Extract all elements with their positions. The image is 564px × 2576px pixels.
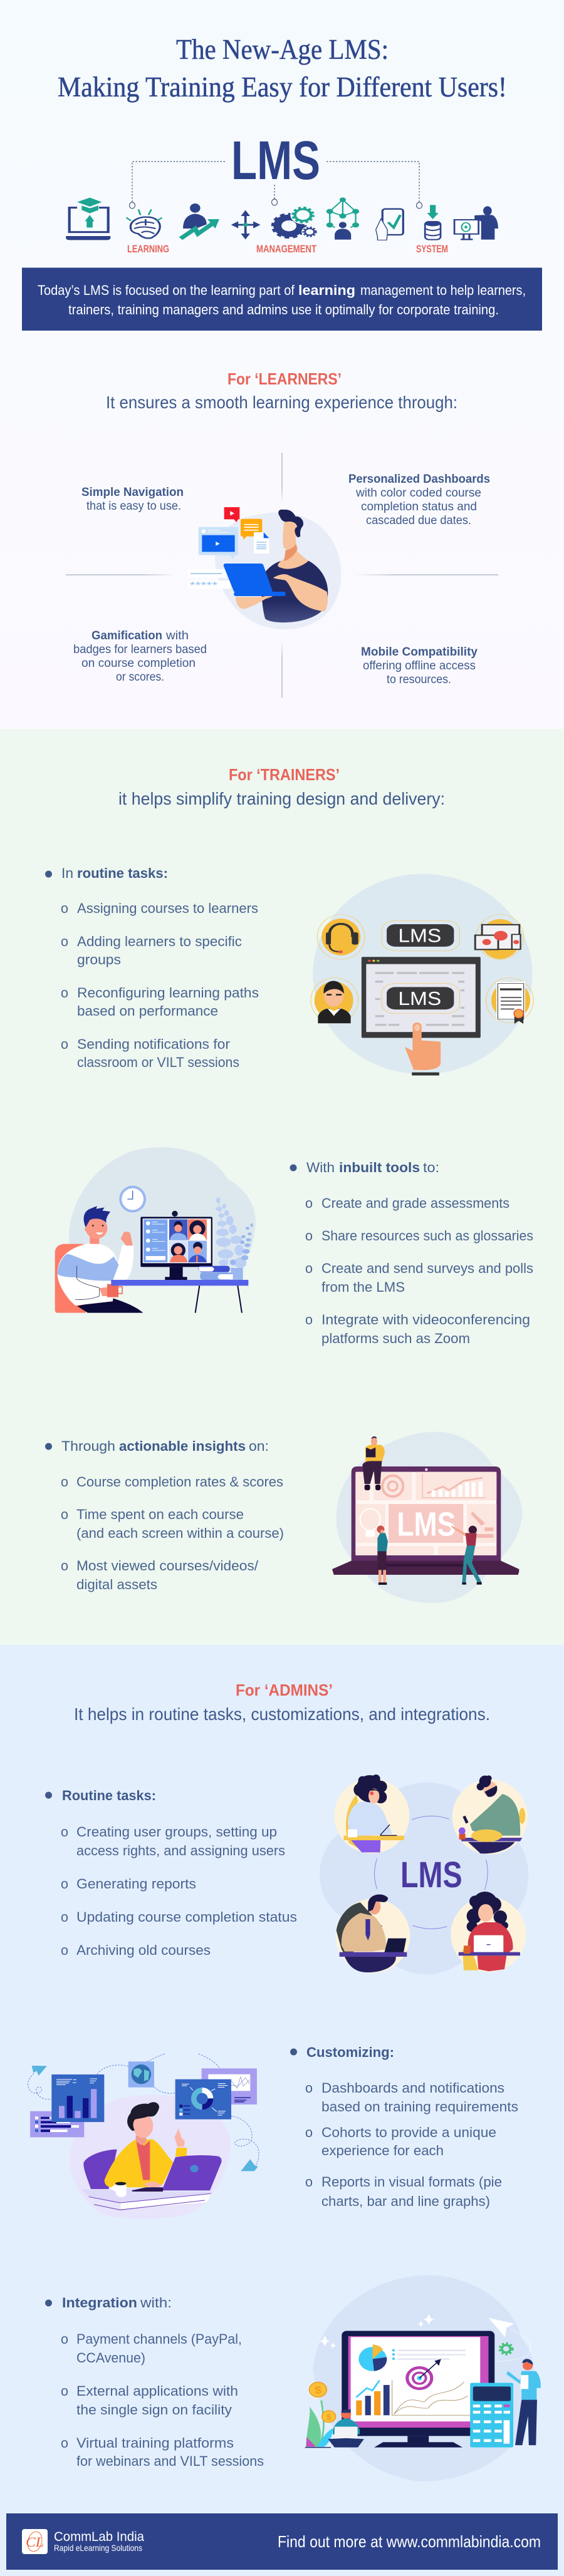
list: routine tasks admin: Archiving old courses [76, 1942, 211, 1958]
list: integration: o [61, 2435, 68, 2451]
list: integration: with: [140, 2295, 172, 2311]
list: customizing: Cohorts to provide a unique [321, 2125, 496, 2140]
text: gamification: or scores. [116, 671, 164, 684]
admin man with laptop [336, 1894, 410, 1973]
list: routine tasks: Assigning courses to learners [77, 900, 258, 916]
list: actionable insights [45, 1438, 284, 1592]
person thinking [377, 1525, 388, 1585]
person sitting with laptop [328, 2409, 364, 2448]
list: customizing: charts, bar and line graphs) [321, 2193, 490, 2209]
list: routine tasks: Reconfiguring learning paths [77, 985, 259, 1001]
heading: learners: For ‘LEARNERS’ [227, 369, 342, 388]
list: integration: External applications with [76, 2383, 238, 2399]
plant with coins: $ [315, 2384, 321, 2396]
list: customizing: Reports in visual formats (pie [321, 2174, 502, 2190]
heading: learners: It ensures a smooth learning experience through: [106, 393, 457, 412]
text: simple navigation [81, 486, 184, 513]
list: actionable insights: Most viewed courses/videos/ [76, 1558, 259, 1574]
illustration: learner with laptop [188, 507, 341, 629]
panel: trainers background [0, 729, 564, 1645]
list: inbuilt tools: Create and send surveys and polls [321, 1260, 533, 1276]
text: mobile compatibility: Mobile Compatibility [361, 646, 478, 659]
list: actionable insights: o [61, 1474, 68, 1490]
list: routine tasks: routine tasks: [77, 865, 168, 881]
laptop [332, 1466, 519, 1575]
icon: network of people [326, 197, 359, 240]
illustration: trainer on video call [55, 1147, 256, 1313]
list: routine tasks admin: Creating user groups, setting up [76, 1824, 277, 1840]
list: integration: CCAvenue) [76, 2350, 145, 2366]
list: actionable insights: Through [61, 1438, 115, 1454]
admin man with phone [452, 1775, 528, 1855]
footer bar: CommLab India [54, 2530, 144, 2544]
icon: brain [127, 209, 162, 238]
illustration: analytics laptop [332, 1432, 522, 1603]
list: integration: for webinars and VILT sessions [76, 2453, 264, 2469]
list: integration [45, 2295, 264, 2469]
text: gamification: badges for learners based [73, 643, 207, 656]
laptop: LMS [397, 1506, 456, 1543]
icon: gears [273, 206, 318, 238]
list: customizing: o [305, 2174, 313, 2190]
icon: laptop with graduation cap [66, 198, 110, 240]
LMS badge [382, 920, 460, 951]
heading: trainers: For ‘TRAINERS’ [229, 765, 340, 784]
list: inbuilt tools: to: [423, 1160, 439, 1175]
title [58, 34, 507, 103]
illustration: admin with dashboards [28, 2054, 259, 2219]
icon: certificate [486, 978, 533, 1024]
list: routine tasks admin: o [61, 1909, 68, 1925]
list: inbuilt tools: platforms such as Zoom [321, 1331, 470, 1346]
list: actionable insights: digital assets [76, 1577, 157, 1592]
list: customizing: o [305, 2125, 313, 2140]
list: inbuilt tools [290, 1160, 533, 1346]
list: routine tasks: classroom or VILT sessions [77, 1054, 239, 1070]
text: personalized dashboards [348, 473, 490, 527]
list: routine tasks admin: o [61, 1876, 68, 1892]
calculator [470, 2383, 513, 2448]
icon: headset [317, 914, 365, 959]
text: simple navigation: that is easy to use. [86, 500, 181, 513]
text: gamification: on course completion [81, 657, 196, 670]
text: gamification: with [165, 629, 189, 642]
title: Making Training Easy for Different Users! [58, 71, 507, 103]
list: inbuilt tools: o [305, 1312, 313, 1327]
logo [22, 2529, 48, 2554]
heading: trainers [118, 765, 445, 808]
connector lines from LMS to categories [129, 162, 422, 209]
list: actionable insights: on: [249, 1438, 269, 1454]
person [224, 510, 328, 622]
intro banner: Today’s LMS is focused on the learning part of [38, 282, 295, 298]
intro banner [22, 268, 542, 331]
text: gamification [73, 629, 207, 684]
list: actionable insights: o [61, 1507, 68, 1522]
text: mobile compatibility: to resources. [387, 673, 451, 686]
list: routine tasks admin: Generating reports [76, 1876, 196, 1892]
login fields: ***** [190, 580, 217, 591]
list: actionable insights: Time spent on each course [76, 1507, 244, 1522]
list: customizing: Customizing: [306, 2044, 394, 2060]
screen: LMS [398, 988, 441, 1009]
list: customizing: experience for each [321, 2143, 444, 2158]
list: integration: Payment channels (PayPal, [76, 2331, 242, 2347]
icon: video devices [475, 914, 524, 959]
list: integration: Integration [62, 2295, 137, 2311]
sparkles [320, 2314, 514, 2349]
intro banner: trainers, training managers and admins use it optimally for corporate training. [68, 302, 499, 317]
list: inbuilt tools: Share resources such as glossaries [321, 1228, 533, 1244]
list: inbuilt tools: from the LMS [321, 1279, 405, 1295]
text: personalized dashboards: with color coded course [355, 487, 481, 500]
LMS badge: LMS [398, 925, 441, 946]
man in sweater [55, 1206, 143, 1313]
list: inbuilt tools: With [306, 1160, 335, 1175]
list: routine tasks: o [61, 934, 68, 949]
list: routine tasks: Adding learners to specific [77, 934, 242, 949]
heading: admins: For ‘ADMINS’ [236, 1681, 333, 1699]
list: routine tasks: based on performance [77, 1003, 218, 1019]
title: The New-Age LMS: [176, 34, 389, 65]
list: inbuilt tools: Integrate with videoconferencing [321, 1312, 530, 1327]
illustration: LMS screen with icons [311, 874, 533, 1076]
panel: intro background [0, 0, 564, 729]
list: inbuilt tools: inbuilt tools [339, 1160, 420, 1175]
illustration: integration analytics monitor [305, 2275, 541, 2481]
footer bar [6, 2513, 558, 2570]
plant with coins: $ [326, 2413, 332, 2421]
icon: paper plane right [241, 2159, 258, 2171]
list: routine tasks admin: o [61, 1942, 68, 1958]
intro banner: learning [298, 282, 355, 298]
connecting arcs [374, 1816, 488, 1929]
icon: clock [120, 1187, 145, 1211]
heading: admins: It helps in routine tasks, customizations, and integrations. [74, 1704, 490, 1724]
list: routine tasks admin [45, 1788, 297, 1958]
screen [362, 957, 481, 1038]
list: actionable insights: o [61, 1558, 68, 1574]
list: routine tasks admin: o [61, 1824, 68, 1840]
list: routine tasks: o [61, 900, 68, 916]
list: inbuilt tools: o [305, 1195, 313, 1211]
heading: LMS: LMS [231, 130, 320, 191]
list: inbuilt tools: o [305, 1228, 313, 1244]
list: integration: o [61, 2383, 68, 2399]
woman in yellow jacket [83, 2102, 187, 2189]
heading: admins [74, 1681, 490, 1724]
list: integration: the single sign on facility [76, 2402, 232, 2418]
heading: learners [106, 369, 457, 412]
person pointing [451, 1525, 482, 1585]
list: routine tasks: groups [77, 952, 121, 967]
person standing with tablet [506, 2359, 541, 2445]
text: mobile compatibility [361, 646, 478, 686]
monitor with video call [140, 1211, 212, 1280]
panel: admins background [0, 1645, 564, 2576]
list: actionable insights: actionable insights [119, 1438, 246, 1454]
category labels [127, 243, 448, 255]
list: customizing [290, 2044, 518, 2209]
category labels: LEARNING [127, 243, 169, 255]
illustration: four admins around LMS [320, 1775, 528, 1974]
list: routine tasks: o [61, 985, 68, 1001]
icon: chat bubble [241, 519, 262, 540]
icon: database with arrow [425, 205, 441, 240]
icon: video window [199, 527, 238, 559]
plant [216, 1197, 253, 1280]
list: routine tasks: o [61, 1036, 68, 1052]
list: routine tasks [45, 865, 259, 1070]
icon: pointing hand [405, 1023, 441, 1076]
icon: paper plane top left [32, 2066, 47, 2076]
list: customizing: Dashboards and notifications [321, 2080, 504, 2096]
list: actionable insights: Course completion rates & scores [76, 1474, 283, 1490]
category labels: SYSTEM [416, 243, 448, 255]
laptop and desk [81, 2155, 222, 2210]
list: integration: o [61, 2331, 68, 2347]
list: routine tasks admin: access rights, and assigning users [76, 1843, 285, 1858]
list: inbuilt tools: Create and grade assessments [321, 1195, 509, 1211]
desk [111, 1280, 248, 1313]
category labels: MANAGEMENT [256, 243, 316, 255]
footer bar: Rapid eLearning Solutions [54, 2543, 142, 2553]
list: routine tasks admin: Routine tasks: [62, 1788, 156, 1803]
icon: tablet and hand [376, 209, 403, 240]
text: personalized dashboards: completion status and [361, 500, 477, 513]
books [199, 1266, 233, 1280]
chart panels [30, 2061, 257, 2137]
text: gamification: Gamification [91, 629, 162, 642]
logo: CL [26, 2534, 44, 2550]
LMS label: LMS [400, 1855, 462, 1895]
monitor [342, 2331, 494, 2448]
text: mobile compatibility: offering offline access [363, 659, 476, 672]
plant with coins [305, 2382, 336, 2448]
dashed flight paths [28, 2054, 259, 2166]
list: routine tasks: In [61, 865, 73, 881]
list: routine tasks: Sending notifications for [77, 1036, 230, 1052]
dividers [66, 453, 498, 698]
icon row: LMS concepts [66, 197, 498, 240]
text: simple navigation: Simple Navigation [81, 486, 184, 499]
icon: presenter at monitor [454, 206, 498, 240]
text: personalized dashboards: cascaded due dates. [366, 514, 471, 527]
list: routine tasks admin: Updating course completion status [76, 1909, 297, 1925]
list: integration: Virtual training platforms [76, 2435, 234, 2451]
icon: person with growth arrow [180, 204, 219, 239]
login fields [188, 569, 231, 591]
icon: document [254, 532, 269, 554]
icon: trainer portrait [311, 978, 358, 1023]
icon: move arrows [231, 210, 261, 239]
list: customizing: based on training requirements [321, 2099, 518, 2115]
heading: trainers: it helps simplify training design and delivery: [118, 789, 445, 808]
list: inbuilt tools: o [305, 1260, 313, 1276]
person sitting [362, 1436, 385, 1490]
list: customizing: o [305, 2080, 313, 2096]
text: personalized dashboards: Personalized Dashboards [348, 473, 490, 486]
list: actionable insights: (and each screen within a course) [76, 1525, 284, 1541]
admin woman with tablet [334, 1775, 409, 1853]
icon: gear and paper plane trail [494, 2329, 531, 2362]
admin woman with laptop [451, 1892, 526, 1972]
icon: video bubble [224, 507, 239, 522]
intro banner: management to help learners, [360, 282, 526, 298]
